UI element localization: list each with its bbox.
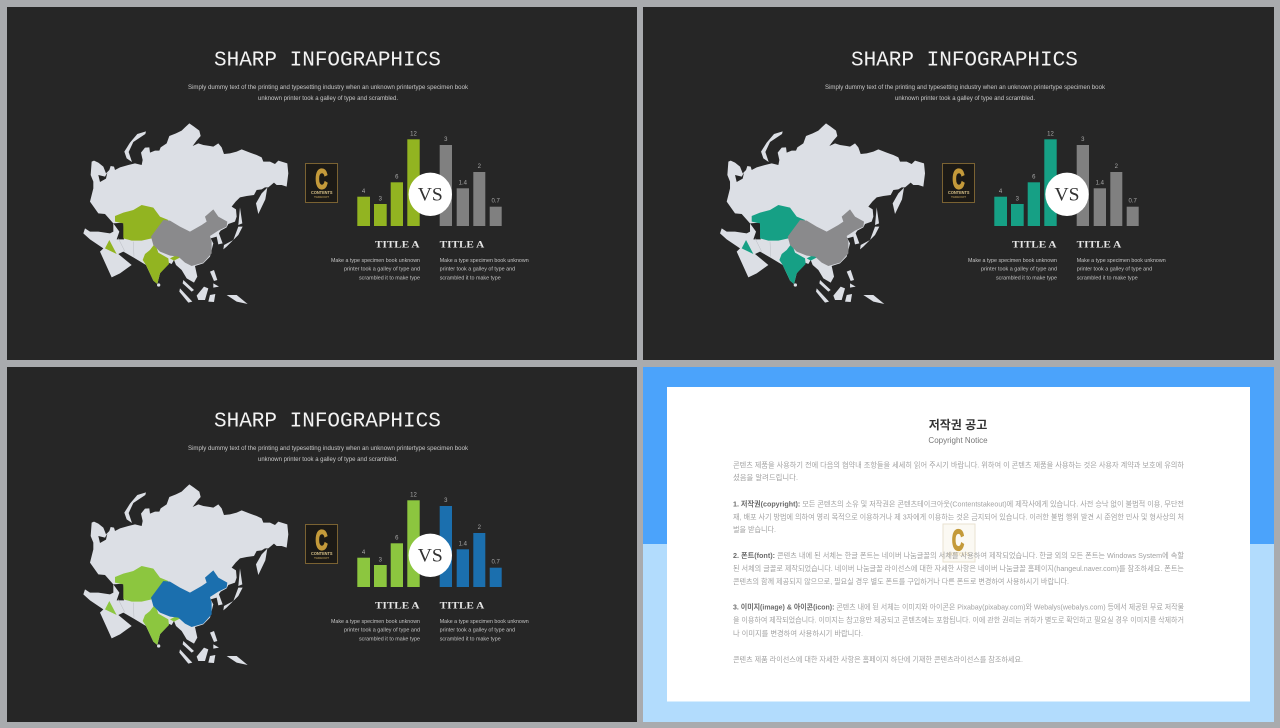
- bar chart right: [440, 145, 502, 226]
- notice section 1: 1. 저작권(copyright): 모든 콘텐츠의 소유 및 저작권은 콘텐츠테이크아웃(Contentstakeout)에 제작사에게 있습니다. 사전 승낙 없이 불법적 이용, 무단전: [733, 500, 1184, 508]
- left description: printer took a galley of type and: [344, 628, 420, 634]
- bar values: 1.4: [1096, 180, 1105, 186]
- notice section 3: 나 이미지를 변경하여 사용하시기 바랍니다.: [733, 629, 863, 638]
- left title: TITLE A: [375, 600, 420, 610]
- subtitle: Simply dummy text of the printing and typesetting industry when an unknown printertype specimen book: [825, 84, 1106, 91]
- left description: [331, 619, 420, 642]
- bar values: 12: [410, 492, 417, 498]
- map of Asia: [83, 123, 288, 304]
- right description: Make a type specimen book unknown: [1077, 258, 1166, 264]
- logo: TAKEOUT: [951, 195, 966, 199]
- left description: Make a type specimen book unknown: [331, 619, 420, 625]
- heading: SHARP INFOGRAPHICS: [214, 50, 441, 72]
- VS badge: VS: [418, 185, 443, 206]
- right description: [440, 619, 529, 642]
- bar values: 4: [362, 550, 366, 556]
- subtitle: unknown printer took a galley of type and scrambled.: [895, 95, 1035, 102]
- notice section 1: 벌을 받습니다.: [733, 525, 776, 534]
- logo: C: [316, 524, 328, 555]
- right description: printer took a galley of type and: [1077, 267, 1152, 273]
- bar values: 3: [444, 498, 448, 504]
- left description: printer took a galley of type and: [344, 267, 420, 273]
- left title: TITLE A: [1012, 240, 1057, 250]
- notice footer line: 콘텐츠 제품 라이선스에 대한 자세한 사항은 홈페이지 하단에 기재한 콘텐츠라이선스를 참조하세요.: [733, 655, 1023, 664]
- VS badge: [409, 534, 452, 577]
- left description: [331, 258, 420, 281]
- left description: [968, 258, 1057, 281]
- left description: printer took a galley of type and: [981, 267, 1057, 273]
- VS badge: VS: [418, 546, 443, 567]
- right description: Make a type specimen book unknown: [440, 258, 529, 264]
- notice section 2: 2. 폰트(font): 콘텐츠 내에 된 서체는 한글 폰트는 네이버 나눔글꼴의 서체를 사용하여 제작되었습니다. 한글 외의 모든 폰트는 Windows System에 속할: [733, 551, 1184, 560]
- logo: [306, 163, 338, 202]
- panel: blue versus slide: [7, 367, 637, 722]
- VS badge: [409, 173, 452, 216]
- heading: SHARP INFOGRAPHICS: [214, 410, 441, 434]
- bar values: [362, 132, 501, 204]
- bar values: [362, 492, 501, 566]
- right title: TITLE A: [440, 240, 485, 250]
- notice heading: 저작권 공고: [929, 417, 987, 432]
- bar chart left: [994, 139, 1057, 226]
- right description: printer took a galley of type and: [440, 267, 515, 273]
- bar values: 4: [999, 189, 1003, 195]
- bar values: 2: [1115, 164, 1119, 170]
- left description: Make a type specimen book unknown: [968, 258, 1057, 264]
- subtitle: Simply dummy text of the printing and typesetting industry when an unknown printertype specimen book: [188, 84, 469, 91]
- bar values: 2: [478, 164, 482, 170]
- bar values: 3: [1081, 137, 1085, 143]
- notice intro: 셨음을 알려드립니다.: [733, 473, 798, 482]
- right title: TITLE A: [440, 600, 485, 610]
- map of Asia: [720, 123, 925, 304]
- subtitle: [825, 84, 1106, 102]
- notice section 2: [733, 551, 1184, 586]
- bar values: 0.7: [492, 198, 501, 204]
- watermark logo: C: [952, 525, 964, 557]
- VS badge: [1045, 173, 1089, 216]
- bar values: 12: [1047, 132, 1054, 138]
- logo: [942, 163, 974, 202]
- bar values: 6: [395, 174, 399, 180]
- bar chart left: [357, 139, 420, 226]
- bar values: 6: [1032, 174, 1036, 180]
- bar chart right: [440, 506, 502, 587]
- notice intro: [733, 460, 1184, 482]
- notice section 1: [733, 500, 1184, 534]
- bar values: 3: [444, 137, 448, 143]
- right description: printer took a galley of type and: [440, 628, 515, 634]
- subtitle: unknown printer took a galley of type and scrambled.: [258, 456, 398, 463]
- bar chart right: [1077, 145, 1139, 226]
- logo: TAKEOUT: [314, 195, 329, 199]
- map of Asia: [83, 484, 288, 665]
- panel: copyright notice: [643, 367, 1274, 722]
- bar values: 3: [1016, 196, 1020, 202]
- bar chart left: [357, 500, 420, 587]
- bar values: 12: [410, 132, 417, 138]
- notice section 2: 콘텐츠의 함께 제공되지 않으므로, 필요실 경우 별도 폰트를 구입하거나 다른 폰트로 변경하여 사용하시기 바랍니다.: [733, 577, 1069, 586]
- panel: green versus slide: [7, 7, 637, 360]
- right description: scrambled it to make type: [1077, 275, 1138, 281]
- right description: [440, 258, 529, 281]
- subtitle: Simply dummy text of the printing and typesetting industry when an unknown printertype specimen book: [188, 445, 469, 452]
- notice section 3: 3. 이미지(image) & 아이콘(icon): 콘텐츠 내에 된 서체는 이미지와 아이콘은 Pixabay(pixabay.com)와 Webalys(webalys.com) 등에서 제공된 무료 저작물: [733, 602, 1184, 612]
- bar values: 3: [379, 558, 383, 564]
- VS badge: VS: [1054, 185, 1080, 206]
- logo: C: [316, 163, 328, 194]
- logo: [306, 524, 338, 564]
- logo: CONTENTS: [948, 190, 970, 195]
- bar values: 0.7: [1129, 198, 1138, 204]
- notice section 3: 을 이용하여 제작되었습니다. 이미지는 참고용만 제공되고 콘텐츠에는 포함됩니다. 이에 관한 권리는 귀하가 별도로 확인하고 필요실 경우 이미지를 삭제하거: [733, 616, 1184, 624]
- notice subheading: Copyright Notice: [928, 436, 988, 445]
- left title: TITLE A: [375, 240, 420, 250]
- bar values: 0.7: [492, 560, 501, 566]
- logo: C: [952, 163, 964, 194]
- left description: scrambled it to make type: [359, 636, 420, 642]
- logo: CONTENTS: [311, 551, 332, 556]
- panel: teal versus slide: [643, 7, 1274, 360]
- left description: Make a type specimen book unknown: [331, 258, 420, 264]
- bar values: 3: [379, 196, 383, 202]
- right description: scrambled it to make type: [440, 275, 501, 281]
- notice section 2: 된 서체의 글꼴로 제작되었습니다. 네이버 나눔글꼴 라이선스에 대한 자세한 사항은 네이버 나눔글꼴 홈페이지(hangeul.naver.com)를 참조하세요. 폰트는: [733, 564, 1184, 573]
- bar values: 6: [395, 536, 399, 542]
- notice section 3: [733, 602, 1184, 638]
- logo: TAKEOUT: [314, 556, 329, 560]
- right description: Make a type specimen book unknown: [440, 619, 529, 625]
- watermark logo: CONTENTS: [948, 552, 970, 556]
- left description: scrambled it to make type: [996, 275, 1057, 281]
- subtitle: unknown printer took a galley of type and scrambled.: [258, 95, 398, 102]
- bar values: 2: [478, 525, 482, 531]
- notice section 1: 재, 배포 사기 방법에 의하여 영리 목적으로 이용하거나 제 3자에게 이용하는 것은 금지되어 있습니다. 이러한 불법 행위 발견 시 준엄한 민사 및 형사상의 처: [733, 512, 1184, 522]
- subtitle: [188, 445, 469, 463]
- right title: TITLE A: [1077, 240, 1122, 250]
- bar values: 1.4: [459, 542, 468, 548]
- watermark logo: [943, 524, 975, 562]
- heading: SHARP INFOGRAPHICS: [851, 50, 1078, 72]
- logo: CONTENTS: [311, 190, 332, 195]
- notice intro: 콘텐츠 제품을 사용하기 전에 다음의 협약내 조항들을 세세히 읽어 주시기 바랍니다. 위하여 이 콘텐츠 제품을 사용하는 것은 사용자 계약과 보호에 유의하: [733, 460, 1184, 470]
- right description: [1077, 258, 1166, 281]
- bar values: 4: [362, 189, 366, 195]
- bar values: 1.4: [459, 180, 468, 186]
- subtitle: [188, 84, 469, 102]
- left description: scrambled it to make type: [359, 275, 420, 281]
- bar values: [999, 132, 1138, 204]
- right description: scrambled it to make type: [440, 636, 501, 642]
